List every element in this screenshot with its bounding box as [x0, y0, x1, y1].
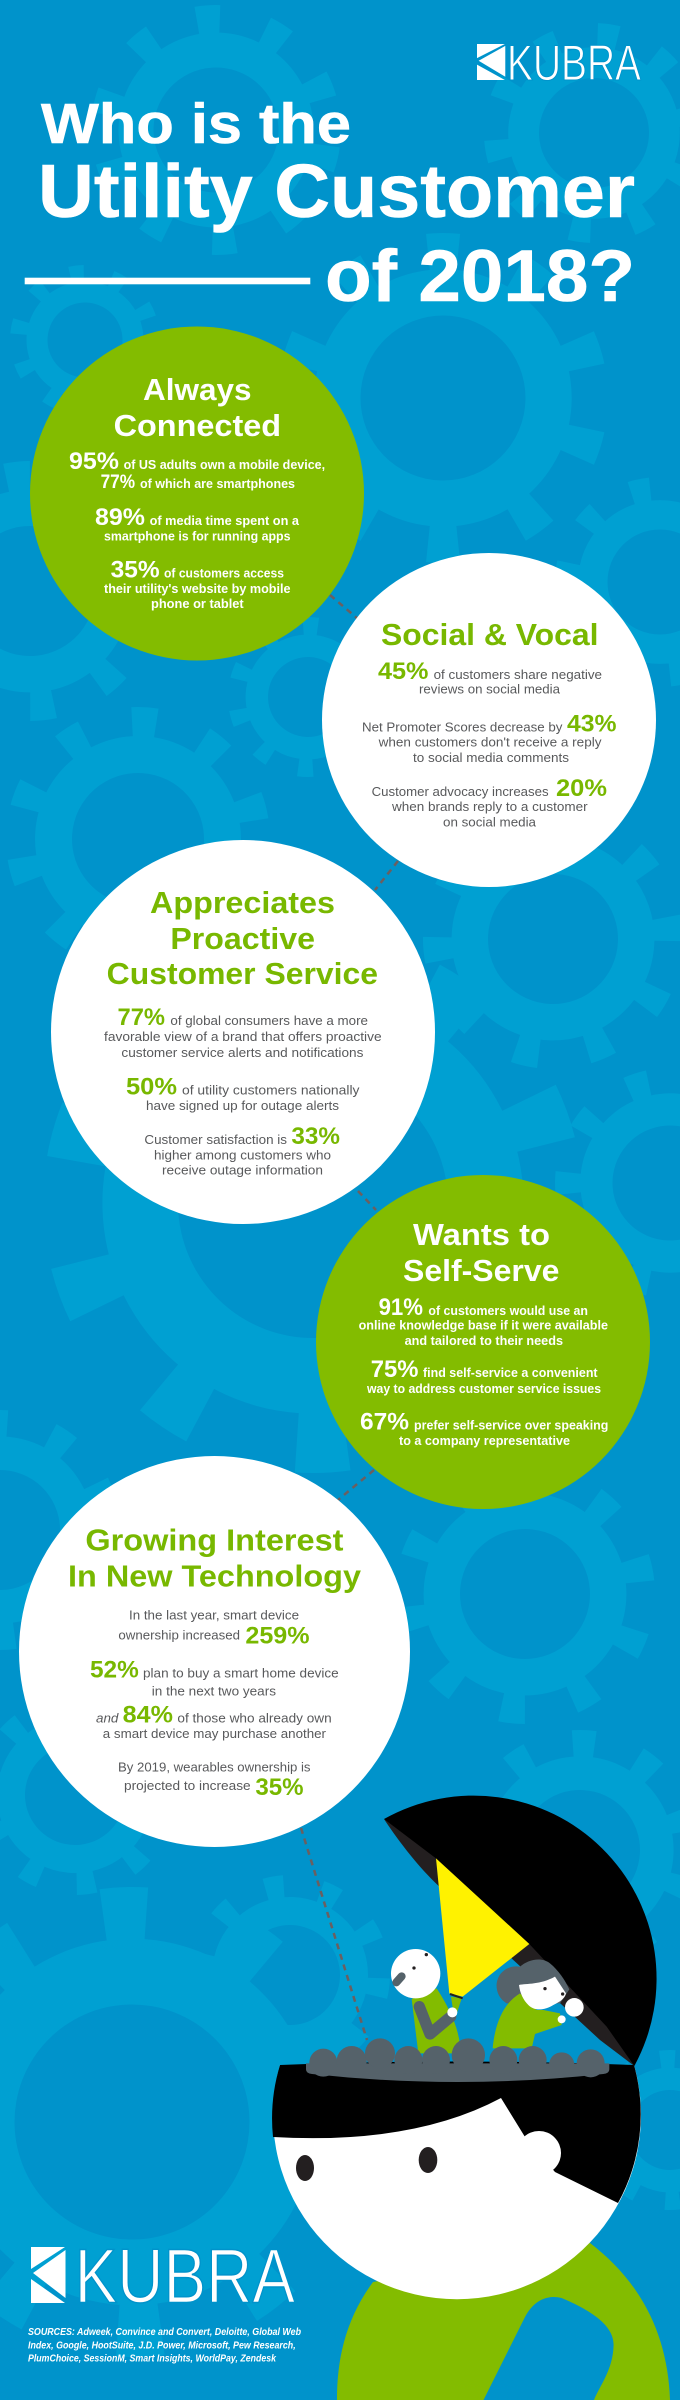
stat: 259% smart device ownership [118, 1607, 310, 1649]
stat: 77% favorable view: favorable view of a brand that offers proactive [104, 1029, 382, 1044]
stat: 20% advocacy: Customer advocacy increases [372, 784, 549, 799]
stat: 95% mobile device: of US adults own a mobile device, [124, 457, 325, 472]
stat: 75% convenient: way to address customer service issues [366, 1381, 601, 1396]
stat: 77% favorable view: customer service alerts and notifications [121, 1045, 364, 1060]
stat: 91% knowledge base: and tailored to their needs [405, 1333, 563, 1348]
panel: social and vocal [322, 553, 656, 887]
stat: 20% advocacy [372, 775, 607, 830]
sources: PlumChoice, SessionM, Smart Insights, WorldPay, Zendesk [28, 2353, 277, 2365]
stat: 91% knowledge base: online knowledge base if it were available [359, 1318, 608, 1333]
heading: growing interest in new technology: In New Technology [68, 1559, 362, 1594]
title [25, 92, 635, 317]
heading: growing interest in new technology [68, 1523, 362, 1594]
character hair [272, 2062, 641, 2203]
flashlight beam [436, 1858, 529, 1997]
stat: 95% mobile device: of which are smartphones [140, 476, 295, 491]
stat: 84% purchase another: a smart device may purchase another [103, 1726, 327, 1741]
panel: growing interest in new technology [19, 1456, 410, 1847]
stat: 35% wearables: 35% [255, 1774, 304, 1801]
stat: 67% prefer self-service: to a company representative [399, 1433, 570, 1448]
heading: growing interest in new technology: Growing Interest [85, 1523, 344, 1558]
stat: 77% favorable view [104, 1004, 382, 1060]
character ear [517, 2131, 561, 2175]
connector: circle 3 to 4 [358, 1191, 376, 1210]
heading: appreciates proactive customer service: Proactive [170, 921, 315, 956]
character eyes [296, 2147, 437, 2181]
stat: 67% prefer self-service: 67% [360, 1409, 409, 1436]
stat: 89% apps [95, 504, 300, 544]
stat: 33% satisfaction: higher among customers who [154, 1148, 331, 1162]
heading: wants to self-serve: Wants to [413, 1217, 550, 1252]
sources: SOURCES: Adweek, Convince and Convert, Deloitte, Global Web [28, 2326, 301, 2338]
stat: 91% knowledge base: 91% [379, 1294, 423, 1321]
stat: 43% net promoter: when customers don't receive a reply [378, 734, 602, 750]
stat: 259% smart device ownership: ownership increased [118, 1627, 240, 1642]
heading: wants to self-serve: Self-Serve [403, 1253, 559, 1288]
stat: 67% prefer self-service [360, 1409, 608, 1448]
heading: wants to self-serve [403, 1217, 559, 1288]
heading: appreciates proactive customer service: Customer Service [107, 956, 378, 991]
character head [273, 2065, 641, 2299]
stat: 20% advocacy: 20% [556, 775, 607, 802]
stat: 259% smart device ownership: In the last year, smart device [129, 1607, 299, 1622]
stat: 45% reviews [378, 658, 602, 697]
stat: 95% mobile device [69, 448, 325, 493]
heading: social and vocal: Social & Vocal [381, 617, 598, 652]
woman with magnifying glass [493, 1960, 584, 2048]
stat: 75% convenient: 75% [371, 1356, 418, 1383]
stat: 45% reviews: reviews on social media [419, 682, 561, 697]
title: Who is the [41, 92, 351, 156]
stat: 43% net promoter: Net Promoter Scores decrease by [362, 719, 563, 734]
stat: 84% purchase another: and [96, 1711, 119, 1726]
connector: circle 4 to 5 [338, 1470, 374, 1500]
stat: 77% favorable view: 77% [118, 1004, 165, 1031]
open head contents [306, 1796, 657, 2082]
heading: always connected: Always [143, 372, 252, 407]
stat: 50% outage alerts: of utility customers nationally [182, 1083, 360, 1098]
stat: 91% knowledge base: of customers would use an [428, 1303, 588, 1318]
stat: 84% purchase another: of those who already own [177, 1711, 332, 1726]
panel: appreciates proactive customer service [51, 840, 435, 1224]
stat: 35% website [104, 556, 290, 611]
heading: always connected: Connected [114, 408, 281, 443]
panel: wants to self-serve [316, 1175, 650, 1509]
stat: 35% website: of customers access [164, 566, 284, 580]
head lid [384, 1796, 657, 2066]
panel: always connected [30, 326, 364, 660]
stat: 33% satisfaction: 33% [291, 1123, 340, 1150]
stat: 43% net promoter [362, 710, 617, 765]
stat: 33% satisfaction: receive outage information [162, 1163, 323, 1178]
stat: 95% mobile device: 95% [69, 448, 119, 475]
stat: 259% smart device ownership: 259% [245, 1622, 310, 1649]
stat: 84% purchase another: 84% [123, 1702, 173, 1729]
stat: 52% smart home device: 52% [90, 1656, 139, 1683]
heading: appreciates proactive customer service: Appreciates [150, 885, 335, 920]
stat: 52% smart home device [90, 1656, 339, 1699]
sources: Index, Google, HootSuite, J.D. Power, Microsoft, Pew Research, [28, 2340, 296, 2352]
connector: circle 2 to 3 [375, 861, 398, 890]
stat: 43% net promoter: to social media comments [413, 750, 570, 765]
stat: 35% website: 35% [111, 556, 160, 584]
stat: 50% outage alerts [126, 1074, 360, 1113]
stat: 52% smart home device: plan to buy a smart home device [143, 1665, 339, 1680]
logo: KUBRA top [477, 35, 642, 91]
stat: 43% net promoter: 43% [567, 710, 617, 737]
stat: 50% outage alerts: have signed up for outage alerts [146, 1098, 340, 1113]
stat: 35% wearables: projected to increase [124, 1778, 251, 1793]
stat: 45% reviews: of customers share negative [434, 667, 602, 682]
stat: 20% advocacy: when brands reply to a customer [391, 799, 588, 814]
stat: 75% convenient: find self-service a convenient [423, 1365, 598, 1380]
stat: 52% smart home device: in the next two years [152, 1684, 277, 1699]
brain [306, 2038, 609, 2082]
character body [337, 2243, 670, 2400]
stat: 67% prefer self-service: prefer self-service over speaking [414, 1418, 608, 1433]
stat: 33% satisfaction [144, 1123, 340, 1178]
sources [28, 2326, 301, 2365]
illustration: character with open head [272, 1796, 670, 2400]
heading: appreciates proactive customer service [107, 885, 378, 991]
stat: 75% convenient [366, 1356, 601, 1396]
title: Utility Customer [38, 149, 635, 233]
stat: 91% knowledge base [359, 1294, 608, 1348]
stat: 35% wearables [118, 1760, 311, 1801]
stat: 33% satisfaction: Customer satisfaction is [144, 1132, 288, 1147]
stat: 95% mobile device: 77% [101, 472, 135, 493]
stat: 45% reviews: 45% [378, 658, 428, 685]
title: of 2018? [325, 236, 635, 317]
stat: 89% apps: 89% [95, 504, 145, 531]
stat: 20% advocacy: on social media [443, 814, 537, 830]
stat: 89% apps: smartphone is for running apps [104, 528, 290, 544]
stat: 35% website: phone or tablet [151, 596, 244, 611]
stat: 35% website: their utility's website by mobile [104, 581, 290, 596]
stat: 77% favorable view: of global consumers have a more [170, 1013, 368, 1028]
small man with flashlight [391, 1949, 463, 2053]
logo: KUBRA top: KUBRA [507, 35, 642, 91]
stat: 50% outage alerts: 50% [126, 1074, 177, 1101]
heading: always connected [114, 372, 281, 443]
stat: 84% purchase another [96, 1702, 332, 1741]
logo: KUBRA bottom: KUBRA [75, 2234, 296, 2320]
connector: circle 1 to 2 [330, 595, 358, 619]
connector: circle 5 to head [301, 1828, 367, 2040]
stat: 89% apps: of media time spent on a [150, 513, 300, 528]
stat: 35% wearables: By 2019, wearables ownership is [118, 1760, 311, 1775]
